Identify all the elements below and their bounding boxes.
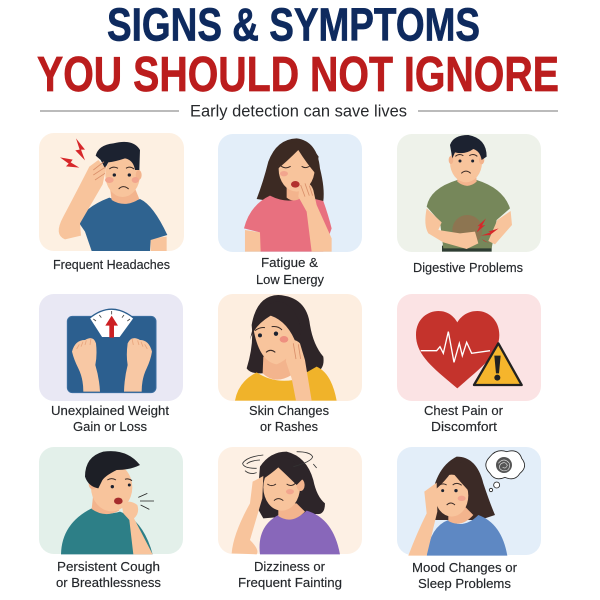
icon: warning triangle <box>474 343 522 385</box>
card: fatigue <box>218 134 362 287</box>
label <box>412 560 518 591</box>
icon: thought bubble <box>486 451 525 492</box>
label: Discomfort <box>431 419 497 434</box>
label <box>249 403 329 434</box>
label: or Breathlessness <box>56 575 161 590</box>
illustration: yawning woman <box>244 138 332 252</box>
label: Unexplained Weight <box>51 403 169 418</box>
illustration: heart with warning triangle <box>416 311 522 388</box>
illustration: bathroom scale with feet <box>67 309 156 393</box>
title: SIGNS & SYMPTOMS <box>107 0 480 50</box>
label: Frequent Headaches <box>53 257 170 272</box>
card: weight <box>39 294 183 434</box>
card: cough <box>39 447 183 590</box>
label: Digestive Problems <box>413 260 523 275</box>
label <box>238 559 342 590</box>
card: digestive problems <box>397 134 541 275</box>
title <box>37 0 559 102</box>
illustration: man holding stomach <box>425 135 512 252</box>
label: Dizziness or <box>254 559 326 574</box>
subtitle: Early detection can save lives <box>190 102 407 120</box>
label: Chest Pain or <box>424 403 504 418</box>
label: or Rashes <box>260 419 318 434</box>
label: Gain or Loss <box>73 419 148 434</box>
label <box>256 255 324 287</box>
label: Sleep Problems <box>418 576 511 591</box>
icon: heart <box>416 311 499 388</box>
label: Skin Changes <box>249 403 329 418</box>
label <box>424 403 504 434</box>
card: skin changes <box>218 294 362 434</box>
illustration: woman with thought bubble <box>408 451 525 556</box>
illustration: man with headache <box>59 138 167 251</box>
illustration: woman touching cheek <box>235 295 337 401</box>
label: Fatigue & <box>261 255 318 270</box>
illustration: coughing man <box>61 451 154 554</box>
card: dizziness <box>218 447 362 590</box>
card: mood changes <box>397 447 541 591</box>
label: Low Energy <box>256 272 324 287</box>
label: Frequent Fainting <box>238 575 342 590</box>
card: chest pain <box>397 294 541 434</box>
illustration: dizzy woman <box>232 452 340 554</box>
label: Persistent Cough <box>57 559 160 574</box>
label <box>56 559 161 590</box>
card: frequent headaches <box>39 133 184 272</box>
label: Mood Changes or <box>412 560 518 575</box>
label <box>51 403 169 434</box>
icon: ECG line <box>421 332 490 362</box>
